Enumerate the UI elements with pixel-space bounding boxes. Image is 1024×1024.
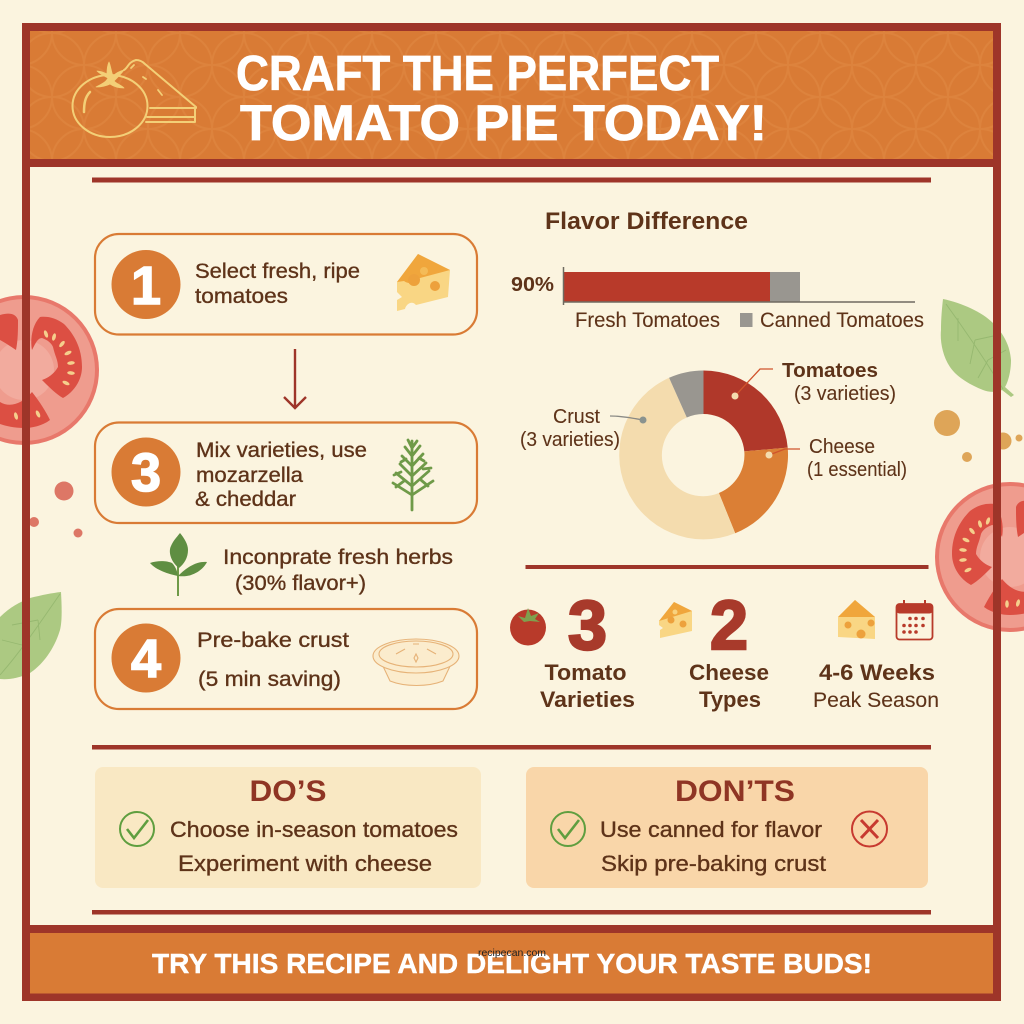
step 1 card: 1 [131,256,161,316]
label: tomatoes: (3 varieties) [794,383,896,405]
bar chart: fresh vs canned: Fresh Tomatoes [575,309,720,332]
stat: tomato varieties: Tomato [544,660,626,685]
stat: tomato varieties: 3 [568,586,607,664]
bar chart: fresh vs canned [511,267,924,332]
decoration: right basil leaf [941,299,1014,397]
decoration: left splatter dots [29,482,82,538]
stat: cheese types: 2 [710,586,748,664]
step 4 card: 4 [131,629,161,689]
heading: flavor difference: Flavor Difference [545,208,748,235]
divider bottom [92,910,931,914]
stat: peak season: Peak Season [813,689,939,712]
icon: pie [373,639,459,686]
panel: do's: Choose in-season tomatoes [170,817,458,842]
step 4 card: (5 min saving) [198,668,341,691]
step 3 card: & cheddar [195,488,296,511]
icon: calendar [896,600,932,640]
stat: tomato varieties: Varieties [540,687,635,712]
footer banner [22,925,1001,1001]
panel: do's: Experiment with cheese [178,851,432,876]
stat: cheese types: Types [699,687,761,712]
stat: tomato varieties [510,586,635,712]
icon: dill sprig [393,440,433,510]
icon: cheese wedge [397,254,450,311]
label: cheese: (1 essential) [807,459,907,481]
label: cheese [766,436,907,481]
bar chart: fresh vs canned: 90% [511,274,554,296]
panel: don'ts: DON’TS [675,775,795,808]
label: cheese: Cheese [809,436,875,458]
icon: cheese [659,602,692,638]
step 4 card: Pre-bake crust [197,629,349,652]
decoration: left tomato slice [0,295,99,445]
icon: check [551,812,585,846]
divider right [526,565,928,569]
step 3 card: 3 [131,443,161,503]
icon: cheese block [838,600,875,639]
stat: cheese types: Cheese [689,660,769,685]
herb tip: Inconprate fresh herbs [223,546,453,569]
title: TOMATO PIE TODAY! [240,95,767,151]
herb tip: (30% flavor+) [235,572,366,595]
panel: do's: DO’S [250,775,326,808]
panel: don'ts: Use canned for flavor [600,817,822,842]
icon: check [120,812,154,846]
label: crust: Crust [553,406,600,428]
panel: don'ts: Skip pre-baking crust [601,851,826,876]
decoration: left basil leaf [0,592,62,679]
divider top [92,178,931,182]
step 1 card: tomatoes [195,285,288,308]
divider lower [92,745,931,750]
panel: don'ts [526,767,928,888]
donut chart [520,360,907,539]
stat: peak season [813,600,939,712]
stat: peak season: 4-6 Weeks [819,660,935,685]
step 4 card [95,609,477,709]
label: tomatoes [732,360,896,405]
icon: parsley sprig [150,533,207,596]
arrow: step 1 to step 3 [284,349,306,408]
watermark: recipecan.com [478,948,546,959]
footer banner: TRY THIS RECIPE AND DELIGHT YOUR TASTE BUDS! [152,948,872,979]
label: tomatoes: Tomatoes [782,360,878,382]
panel: do's [95,767,481,888]
title [236,47,767,151]
icon: cross [852,812,887,846]
title: CRAFT THE PERFECT [236,47,719,101]
herb tip [150,533,453,596]
decoration: right spice dots [934,410,1022,462]
bar chart: fresh vs canned: Canned Tomatoes [760,309,924,332]
step 3 card: mozarzella [196,464,303,487]
step 3 card [95,422,477,523]
step 1 card [95,234,477,334]
label: crust [520,406,646,451]
step 3 card: Mix varieties, use [196,439,367,462]
label: crust: (3 varieties) [520,429,620,451]
header banner [22,23,1001,167]
stat: cheese types [659,586,769,712]
step 1 card: Select fresh, ripe [195,260,360,283]
icon: tomato and pie slice [72,60,196,137]
icon: tomato [510,608,546,646]
decoration: right tomato slice [935,482,1024,632]
